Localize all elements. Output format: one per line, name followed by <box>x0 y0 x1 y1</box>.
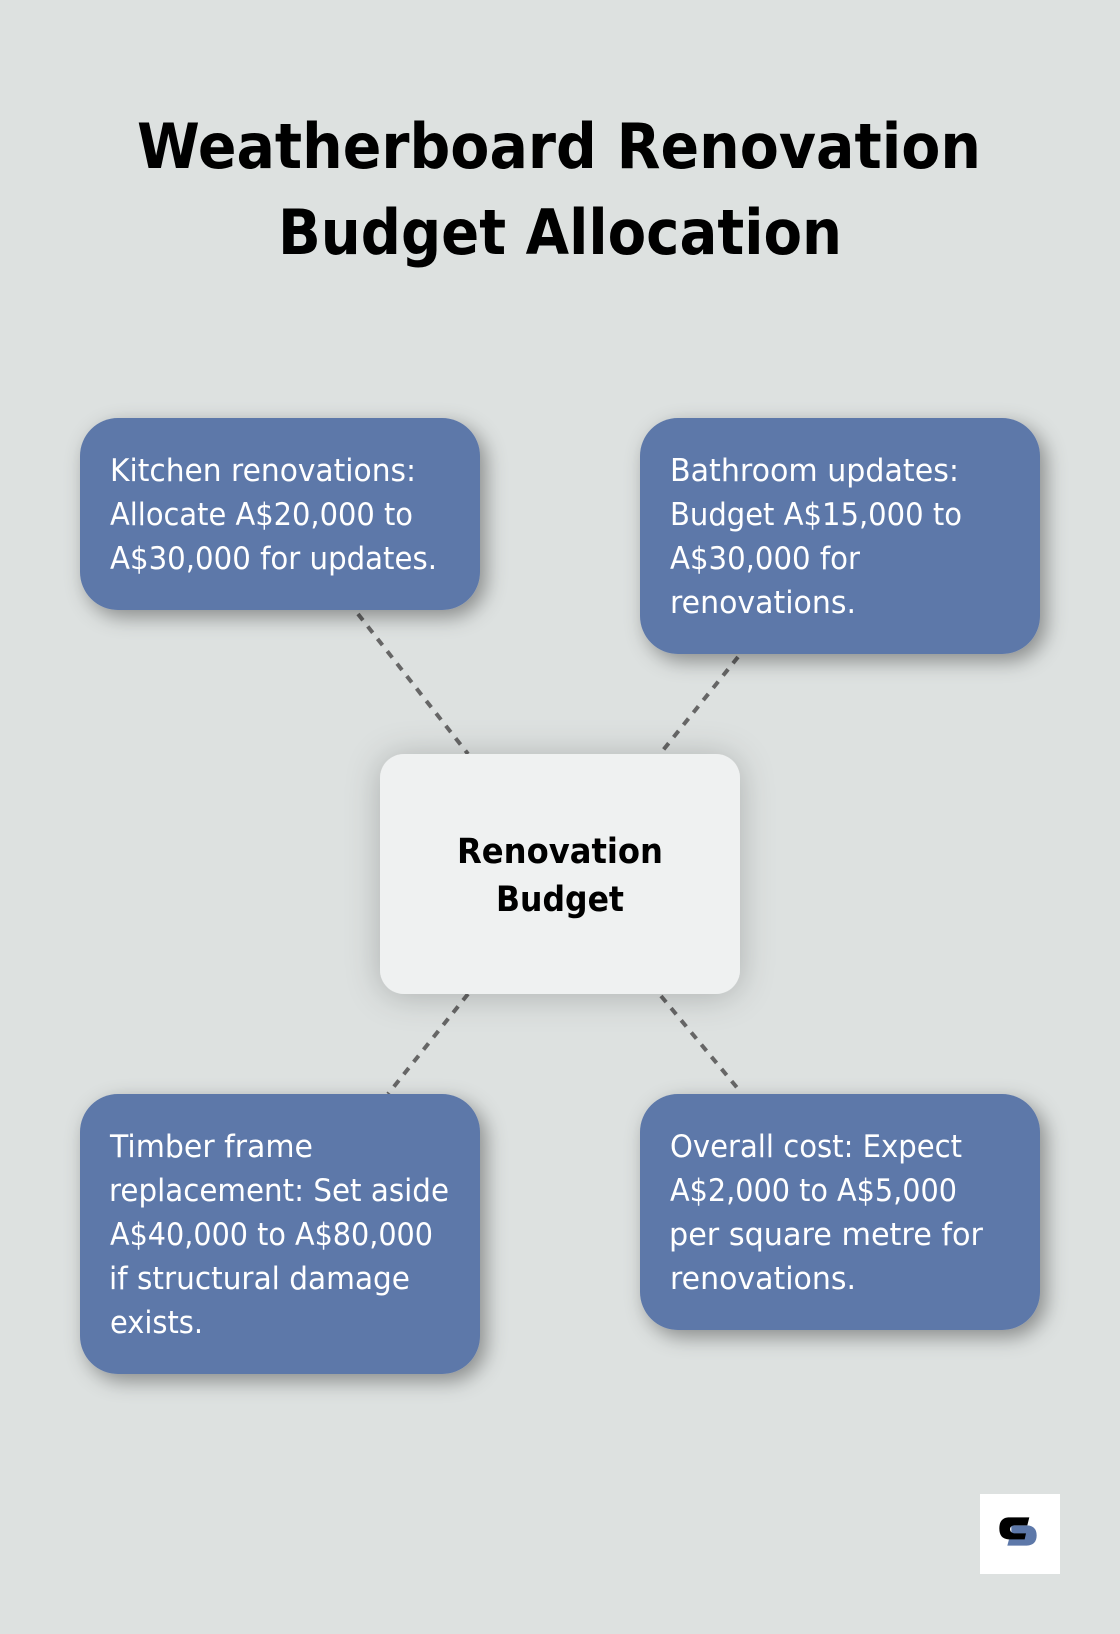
panel: bathroom updates <box>640 418 1040 654</box>
panel: overall cost: Overall cost: Expect <box>670 1129 962 1165</box>
panel: timber frame replacement: A$40,000 to A$80,000 <box>110 1217 433 1253</box>
panel: overall cost <box>640 1094 1040 1330</box>
panel: bathroom updates: Budget A$15,000 to <box>670 497 962 533</box>
connector: kitchen to centre <box>358 614 468 754</box>
panel: timber frame replacement <box>80 1094 480 1374</box>
title: Weatherboard Renovation <box>137 110 981 183</box>
panel: timber frame replacement: exists. <box>110 1305 203 1341</box>
connector: overall cost to centre <box>661 996 739 1090</box>
panel: overall cost: per square metre for <box>669 1217 983 1253</box>
title: Budget Allocation <box>278 196 842 269</box>
connector: timber to centre <box>388 994 468 1094</box>
panel: renovation budget centre: Budget <box>496 880 624 920</box>
logo <box>980 1494 1060 1574</box>
panel: timber frame replacement: if structural damage <box>109 1261 410 1297</box>
panel: timber frame replacement: Timber frame <box>109 1129 313 1165</box>
panel: bathroom updates: renovations. <box>670 585 856 621</box>
panel: bathroom updates: Bathroom updates: <box>670 453 959 489</box>
title <box>137 110 981 269</box>
panel: kitchen renovations <box>80 418 480 610</box>
panel: renovation budget centre <box>380 754 740 994</box>
panel: bathroom updates: A$30,000 for <box>670 541 860 577</box>
panel: timber frame replacement: replacement: Set aside <box>109 1173 449 1209</box>
panel: kitchen renovations: Kitchen renovations: <box>110 453 416 489</box>
panel: overall cost: renovations. <box>670 1261 856 1297</box>
panel: renovation budget centre: Renovation <box>457 832 663 872</box>
panel: kitchen renovations: Allocate A$20,000 to <box>110 497 413 533</box>
panel: kitchen renovations: A$30,000 for updates. <box>110 541 437 577</box>
connector: bathroom to centre <box>660 657 738 754</box>
panel: overall cost: A$2,000 to A$5,000 <box>670 1173 957 1209</box>
